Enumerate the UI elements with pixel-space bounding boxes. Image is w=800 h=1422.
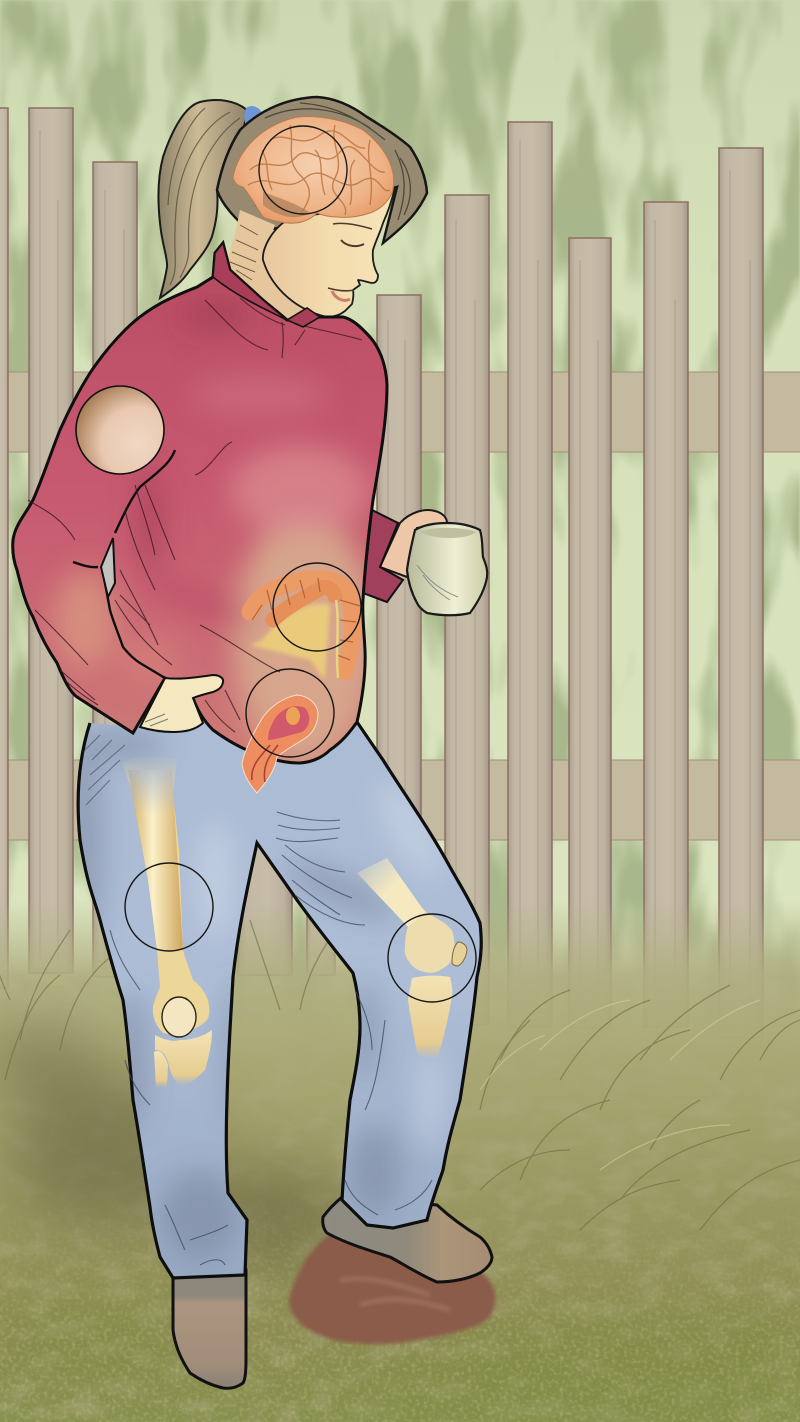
intestine overlay xyxy=(250,563,361,680)
pocket hand xyxy=(140,675,223,732)
neck xyxy=(225,210,320,320)
raised shoe xyxy=(323,1197,492,1282)
facial features xyxy=(328,223,372,300)
sleeve gap xyxy=(101,538,115,597)
front shoe xyxy=(173,1270,246,1388)
shoes xyxy=(173,1197,492,1388)
right leg bones xyxy=(357,858,476,1060)
sweater xyxy=(0,230,400,770)
grass and ground xyxy=(0,900,800,1422)
ponytail xyxy=(158,100,247,298)
mug xyxy=(407,523,487,615)
arm window: skin exposed xyxy=(76,386,164,474)
hair xyxy=(217,97,427,243)
far cuff xyxy=(363,510,403,602)
face xyxy=(263,187,395,317)
fence pickets xyxy=(0,108,763,1038)
left leg bones xyxy=(122,757,213,1088)
brain xyxy=(233,117,394,223)
fence rails xyxy=(0,372,800,840)
hair tie xyxy=(244,106,262,128)
jeans xyxy=(60,698,481,1278)
collar xyxy=(213,243,320,327)
rock xyxy=(289,1233,496,1344)
uterus overlay xyxy=(242,669,334,793)
far hand xyxy=(380,510,447,577)
